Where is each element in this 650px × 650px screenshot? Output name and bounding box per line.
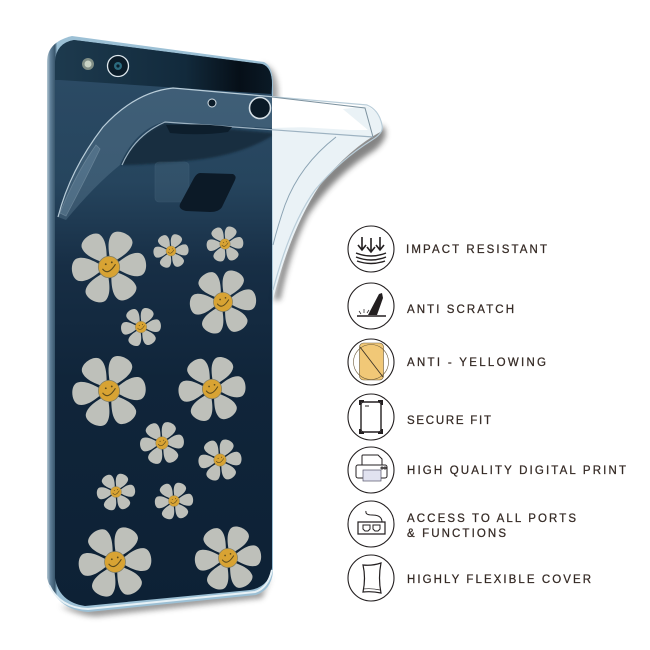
icon: flexible cover: [348, 555, 394, 601]
icon: phone case: [348, 394, 394, 440]
flash: [82, 58, 94, 70]
feature: digital print: [348, 447, 626, 493]
feature: ports access: [348, 501, 576, 547]
flower 12: [78, 524, 152, 600]
glass camera band: [55, 40, 272, 94]
phone back panel: [55, 40, 272, 606]
icon: ports: [348, 501, 394, 547]
label: IMPACT RESISTANT: [406, 244, 547, 256]
label: ACCESS TO ALL PORTS: [407, 513, 576, 525]
label: HIGH QUALITY DIGITAL PRINT: [407, 465, 626, 477]
inner curve line: [273, 137, 336, 245]
flower 5: [121, 306, 161, 348]
flower 4: [189, 268, 257, 336]
flap body over phone: [58, 88, 272, 220]
label: SECURE FIT: [407, 415, 491, 427]
label: HIGHLY FLEXIBLE COVER: [407, 574, 591, 586]
label: & FUNCTIONS: [407, 528, 506, 540]
flower 7: [178, 354, 246, 424]
flap outline: [58, 88, 382, 290]
icon: scratch blade: [348, 283, 394, 329]
top bar edge: [272, 97, 373, 137]
camera lens: [108, 56, 128, 76]
side button cover: [60, 145, 100, 216]
flowers print: [71, 225, 262, 600]
icon: yellow case: [348, 339, 394, 385]
flower 13: [194, 524, 262, 592]
flower 3: [206, 225, 244, 263]
feature: flexible cover: [348, 555, 591, 601]
icon: printer: [348, 447, 394, 493]
case flash hole: [208, 99, 216, 107]
label: [407, 513, 576, 540]
phone: [47, 36, 278, 616]
case flap: [49, 88, 386, 609]
case bottom edge highlight: [49, 570, 272, 609]
feature: impact resistant: [348, 226, 547, 272]
icon: impact arrows: [348, 226, 394, 272]
flap drop shadow: [274, 125, 386, 300]
flower 11: [154, 481, 194, 521]
feature: secure fit: [348, 394, 491, 440]
feature: anti scratch: [348, 283, 514, 329]
case slit: [166, 124, 232, 134]
window opening: [272, 96, 350, 128]
fingerprint cut-out: [180, 173, 236, 212]
phone rim: [47, 36, 273, 612]
flower 8: [139, 420, 185, 466]
flower 10: [96, 472, 136, 512]
flower 2: [153, 233, 189, 269]
flower 6: [71, 353, 147, 429]
flower 1: [71, 228, 147, 306]
label: ANTI SCRATCH: [407, 304, 514, 316]
case camera hole: [250, 98, 270, 118]
fingerprint reader cover: [155, 162, 189, 202]
flower 9: [198, 438, 242, 482]
lower bar edge: [122, 122, 373, 165]
flap white translucent area: [272, 106, 382, 300]
phone shadow: [262, 64, 278, 130]
shadow under case flap: [121, 123, 272, 165]
label: ANTI - YELLOWING: [407, 357, 546, 369]
feature: anti yellowing: [348, 339, 546, 385]
